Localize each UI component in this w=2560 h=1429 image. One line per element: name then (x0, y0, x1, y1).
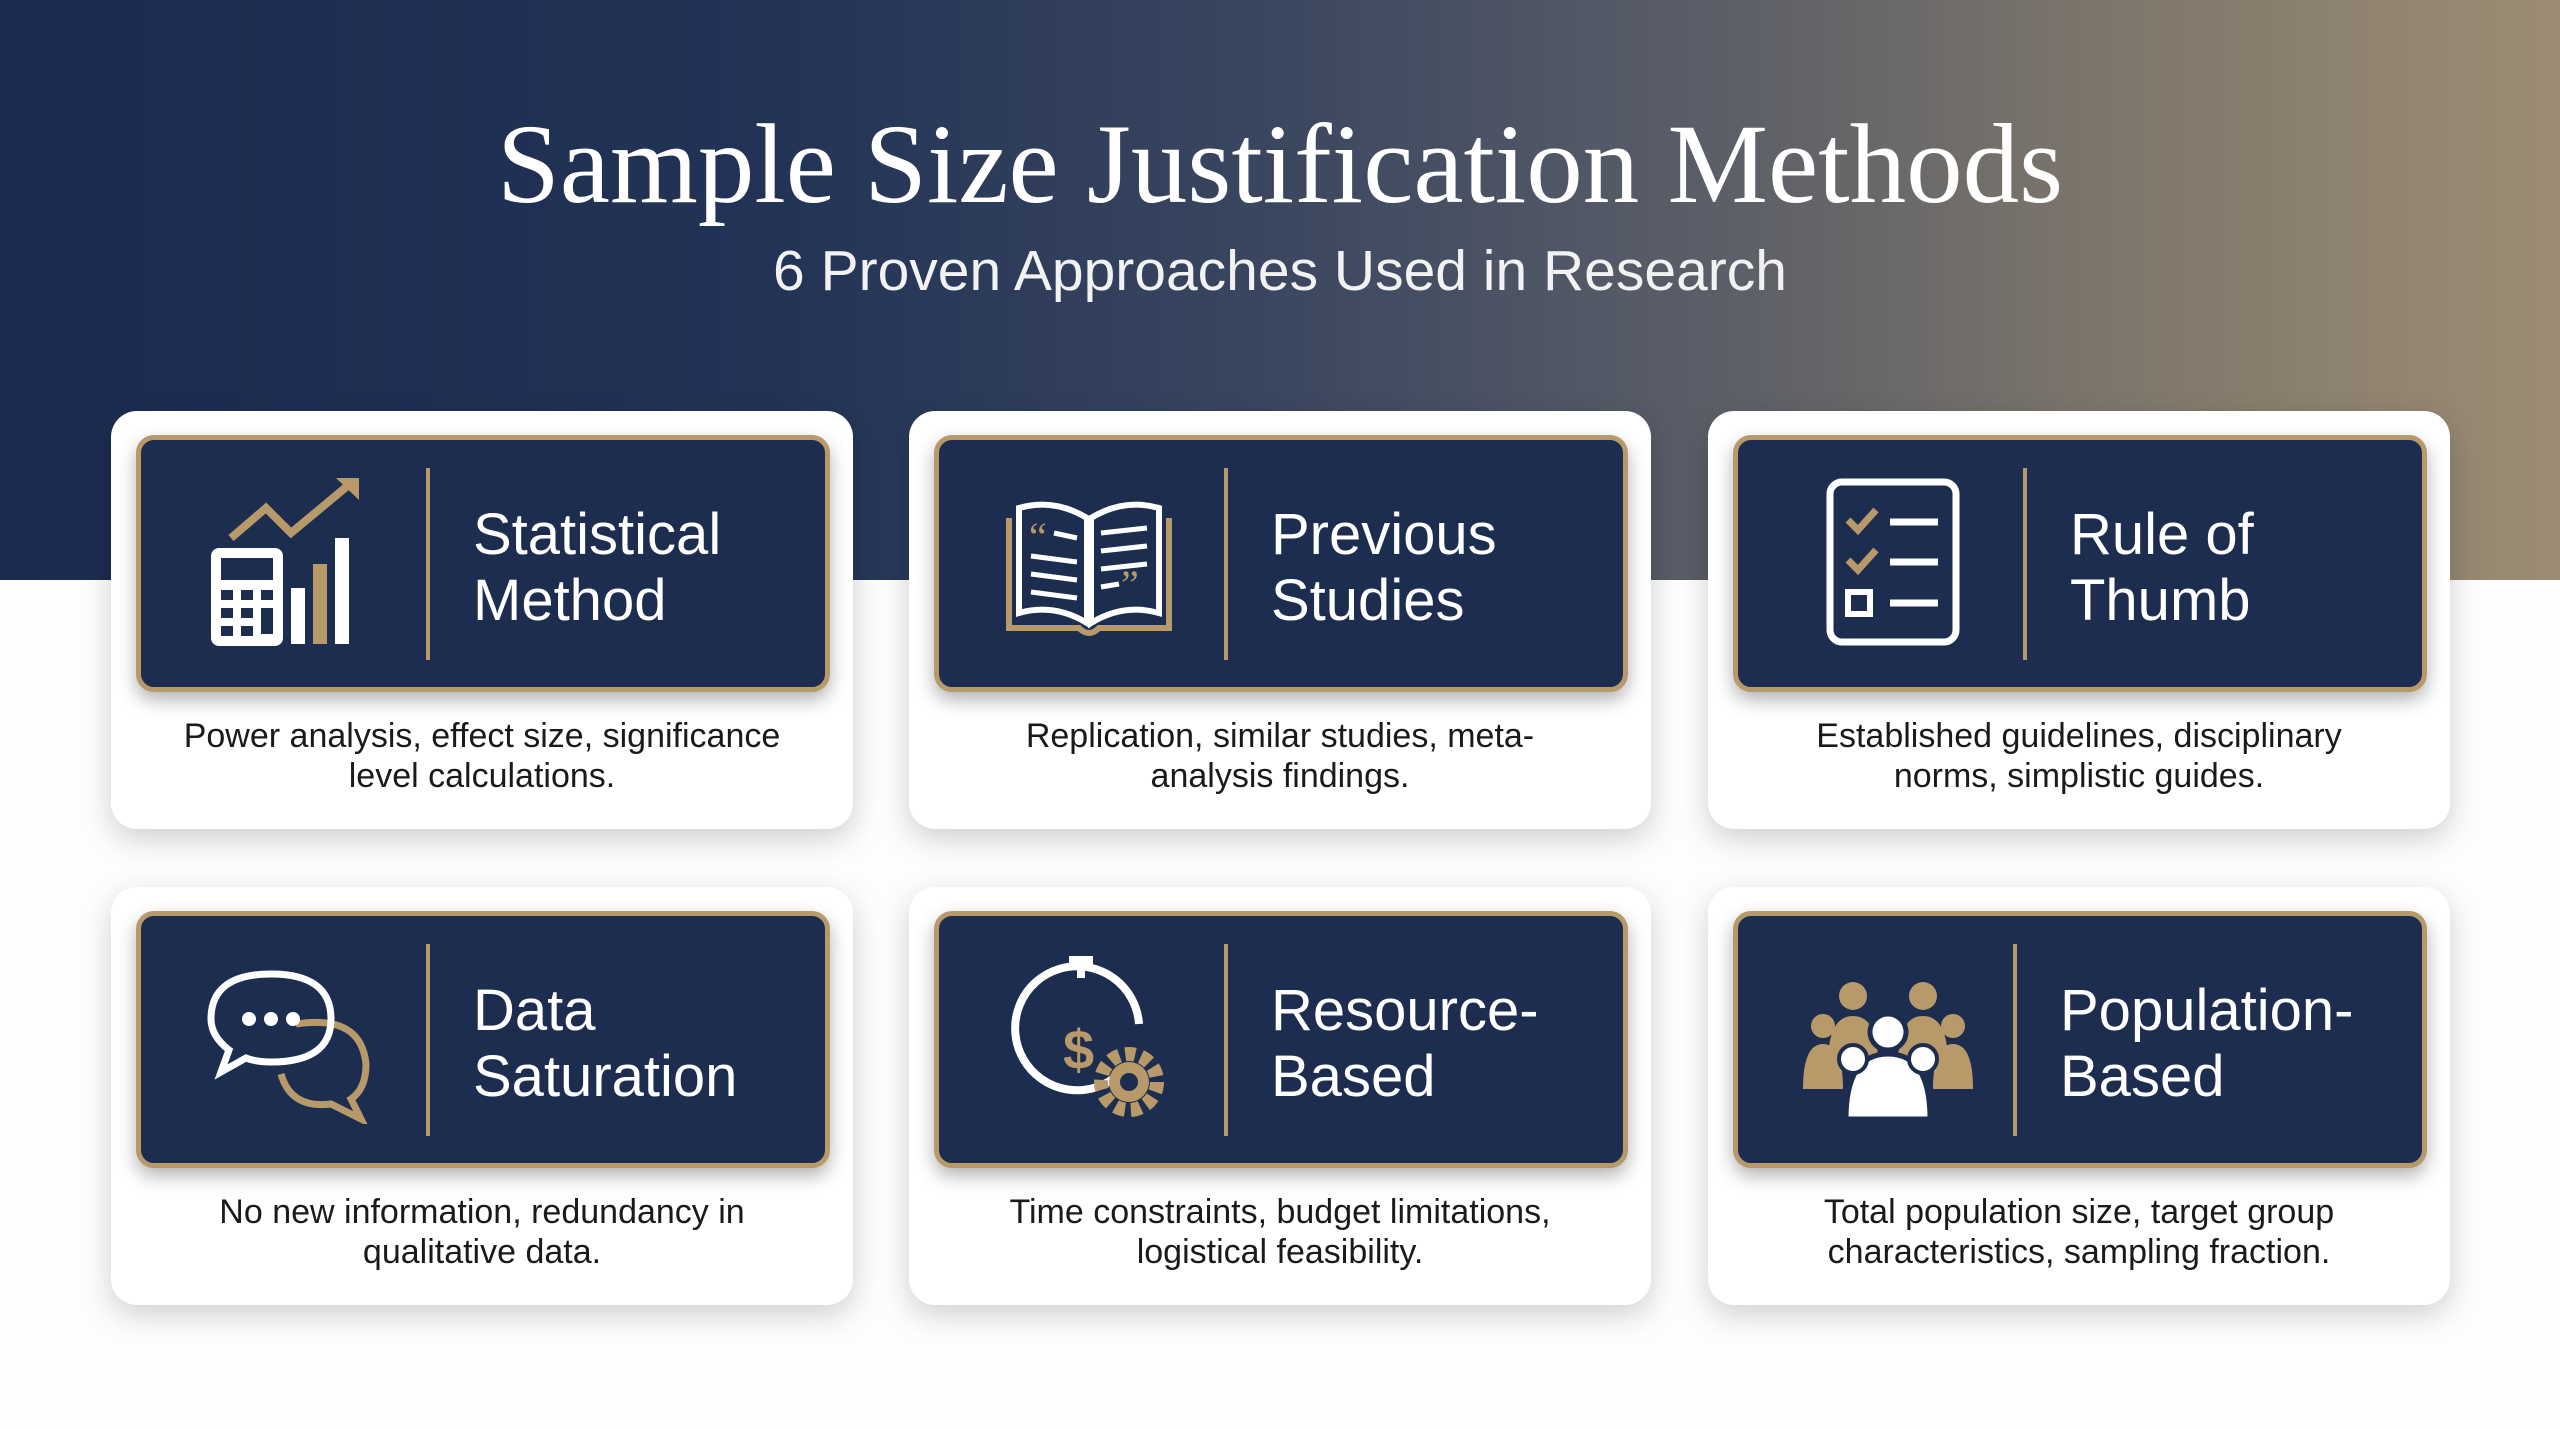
icon box: rule of thumb (1733, 435, 2427, 692)
subtitle: 6 Proven Approaches Used in Research (773, 239, 1787, 303)
panel: resource-based (909, 887, 1651, 1305)
heading: Data (473, 978, 596, 1043)
heading (1271, 978, 1539, 1109)
description: Total population size, target group characteristics, sampling fraction. (1824, 1193, 2334, 1271)
heading: Statistical (473, 502, 721, 567)
heading (2060, 978, 2353, 1109)
icon box: previous (934, 435, 1628, 692)
heading: Previous (1271, 502, 1497, 567)
icon box: resource (934, 911, 1628, 1168)
heading: Resource- (1271, 978, 1539, 1043)
icon: checklist (1826, 478, 1960, 646)
panel: population-based (1708, 887, 2450, 1305)
heading: Saturation (473, 1044, 737, 1109)
heading: Based (2060, 1044, 2224, 1109)
icon: open book: “ (1029, 514, 1047, 559)
header background (0, 0, 2560, 580)
icon: open book: ” (1121, 562, 1139, 607)
heading (2070, 502, 2254, 633)
icon: calculator and chart (211, 478, 359, 646)
heading: Rule of (2070, 502, 2254, 567)
title: Sample Size Justification Methods (497, 102, 2063, 227)
heading: Based (1271, 1044, 1435, 1109)
panel: previous studies (909, 411, 1651, 829)
description: No new information, redundancy in qualitative data. (219, 1193, 745, 1271)
icon: chat bubbles (208, 970, 370, 1124)
description: Replication, similar studies, meta-analysis findings. (1026, 717, 1534, 795)
icon: stopwatch and gear (1011, 956, 1164, 1117)
panel: data saturation (111, 887, 853, 1305)
icon: open book (1006, 502, 1172, 636)
description: Time constraints, budget limitations, logistical feasibility. (1009, 1193, 1551, 1271)
heading: Method (473, 568, 666, 633)
icon box: population (1733, 911, 2427, 1168)
heading: Studies (1271, 568, 1464, 633)
description: Established guidelines, disciplinary norms, simplistic guides. (1816, 717, 2342, 795)
description: Power analysis, effect size, significance level calculations. (184, 717, 780, 795)
heading (473, 502, 721, 633)
heading: Thumb (2070, 568, 2251, 633)
panel: statistical method (111, 411, 853, 829)
icon box: statistical (136, 435, 830, 692)
panel: rule of thumb (1708, 411, 2450, 829)
heading (473, 978, 737, 1109)
icon: stopwatch and gear: $ (1063, 1018, 1094, 1081)
icon box: saturation (136, 911, 830, 1168)
heading (1271, 502, 1497, 633)
icon: people group (1803, 982, 1973, 1116)
heading: Population- (2060, 978, 2353, 1043)
